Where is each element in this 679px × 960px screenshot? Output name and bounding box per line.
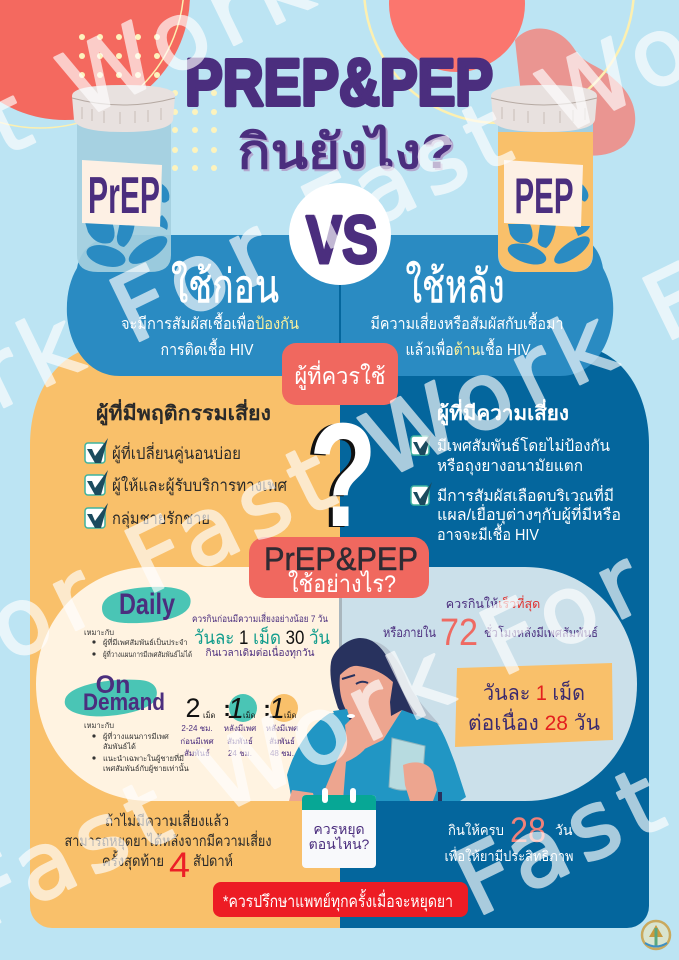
stop guidance: left text: ถ้าไม่มีความเสี่ยงแล้ว: [105, 810, 229, 830]
illustration: woman taking a pill: [287, 638, 466, 801]
left group: risky behaviour: [96, 398, 287, 529]
on demand suitability list: ผู้ที่วางแผนการมีเพศ: [103, 731, 169, 741]
right group: at-risk people: [437, 398, 621, 544]
on demand blob and heading: Demand: [83, 689, 165, 716]
on demand doses: 2: [185, 693, 201, 723]
on demand doses: สัมพันธ์: [184, 748, 210, 758]
on demand suitability list: แนะนำเฉพาะในผู้ชายที่มี: [103, 753, 184, 763]
stop guidance: right text: 28: [510, 811, 546, 850]
daily blob and heading: Daily: [119, 588, 175, 621]
doctor warning bar: *ควรปรึกษาแพทย์ทุกครั้งเมื่อจะหยุดยา: [223, 889, 453, 912]
on demand doses: ก่อนมีเพศ: [180, 737, 214, 746]
on demand doses: เม็ด: [243, 710, 256, 720]
on demand suitability list: [84, 721, 189, 773]
stop guidance: left text: สัปดาห์: [193, 853, 233, 870]
glass of water: [389, 738, 425, 790]
on demand doses: สัมพันธ์: [269, 736, 295, 746]
calendar: when to stop: ควรหยุด: [313, 821, 365, 838]
stop guidance: right text: กินให้ครบ: [448, 822, 504, 838]
calendar: when to stop: ตอนไหน?: [309, 836, 370, 852]
PEP timing text: หรือภายใน: [383, 625, 436, 640]
title: กินยังไง?: [240, 125, 456, 181]
title: PREP&PEP: [185, 45, 493, 119]
background blobs: [0, 0, 635, 171]
shirt: [287, 710, 466, 801]
left group: risky behaviour: กลุ่มชายรักชาย: [112, 510, 210, 529]
right group: at-risk people: แผล/เยื่อบุต่างๆกับผู้ที่มีหรือ: [437, 504, 621, 525]
on demand doses: หลังมีเพศ: [266, 724, 298, 733]
bottle body: dark blue right half: [340, 345, 649, 928]
on demand doses: สัมพันธ์: [227, 736, 253, 746]
before-use text: จะมีการสัมผัสเชื้อเพื่อป้องกัน: [121, 312, 299, 333]
right group: at-risk people: มีเพศสัมพันธ์โดยไม่ป้องกัน: [437, 437, 610, 455]
on demand doses: หลังมีเพศ: [224, 724, 256, 733]
before-use text: [121, 260, 299, 359]
face and chest: [340, 666, 402, 757]
stop guidance: right text: [444, 811, 574, 864]
left group: risky behaviour: ผู้ที่เปลี่ยนคู่นอนบ่อย: [112, 442, 241, 464]
on demand doses: 24 ชม.: [228, 749, 252, 758]
right hand: [403, 762, 437, 801]
title: กินยังไง?: [238, 123, 454, 179]
PEP dosage box: ต่อเนื่อง 28 วัน: [468, 708, 600, 735]
forearm and hand: [320, 726, 371, 801]
usage panel: cream left: [36, 567, 340, 801]
on demand blob and heading: [65, 671, 165, 716]
PEP dosage box: [455, 663, 613, 747]
before-use text: ใช้ก่อน: [171, 260, 279, 312]
daily dosage: ควรกินก่อนมีความเสี่ยงอย่างน้อย 7 วัน: [192, 612, 328, 625]
PEP timing text: 72: [440, 612, 478, 654]
left checkboxes: [85, 438, 108, 528]
stop guidance: left text: [64, 810, 272, 885]
after-use text: มีความเสี่ยงหรือสัมผัสกับเชื้อมา: [370, 312, 564, 333]
logo emblem: [642, 921, 670, 949]
after-use text: ใช้หลัง: [406, 260, 504, 312]
bottle neck: blue band: [67, 235, 613, 376]
on demand suitability list: เพศสัมพันธ์กับผู้ชายเท่านั้น: [103, 763, 189, 773]
doctor warning bar: [213, 882, 468, 917]
on demand doses: เม็ด: [203, 710, 216, 720]
hair: [330, 638, 417, 735]
VS badge: VS: [306, 202, 378, 278]
before-use text: การติดเชื้อ HIV: [160, 338, 254, 359]
bottle body: orange left half: [30, 345, 340, 928]
right group: at-risk people: ผู้ที่มีความเสี่ยง: [437, 398, 569, 427]
right checkboxes: [411, 432, 432, 505]
right group: at-risk people: มีการสัมผัสเลือดบริเวณที่มี: [437, 485, 614, 505]
jar: PrEP: [72, 85, 175, 272]
PEP dosage box: วันละ 1 เม็ด: [483, 679, 585, 705]
calendar: when to stop: [302, 788, 376, 868]
VS badge: [289, 183, 391, 285]
who-should-use button: ผู้ที่ควรใช้: [294, 360, 386, 390]
stop guidance: left text: สามารถหยุดยาได้หลังจากมีความเสี่ยง: [64, 830, 272, 851]
how-to-use button: PrEP&PEP: [264, 541, 418, 577]
after-use text: [370, 260, 564, 359]
how-to-use button: [249, 537, 429, 598]
PEP timing text: [383, 595, 598, 654]
on demand doses: :: [223, 696, 231, 721]
on demand doses: 48 ชม.: [270, 749, 294, 758]
daily dosage: [192, 612, 330, 659]
left group: risky behaviour: ผู้ที่มีพฤติกรรมเสี่ยง: [96, 398, 271, 427]
stop guidance: left text: 4: [169, 846, 190, 885]
who-should-use button: [282, 343, 398, 405]
daily suitability list: ผู้ที่วางแผนการมีเพศสัมพันธ์ไม่ได้: [103, 649, 192, 659]
right group: at-risk people: อาจจะมีเชื้อ HIV: [437, 523, 540, 544]
jar: PEP: [491, 85, 597, 272]
PEP timing text: ชั่วโมงหลังมีเพศสัมพันธ์: [484, 624, 598, 640]
jar: PEP: PEP: [514, 168, 574, 224]
daily suitability list: ผู้ที่มีเพศสัมพันธ์เป็นประจำ: [103, 637, 188, 647]
title: [185, 45, 493, 181]
on demand doses: เม็ด: [284, 710, 297, 720]
stop guidance: left text: ครั้งสุดท้าย: [102, 850, 164, 871]
stop guidance: right text: เพื่อให้ยามีประสิทธิภาพ: [444, 847, 574, 864]
on demand doses: :: [263, 696, 271, 721]
right group: at-risk people: หรือถุงยางอนามัยแตก: [437, 457, 583, 476]
daily dosage: วันละ 1 เม็ด 30 วัน: [194, 625, 330, 649]
on demand doses: 2-24 ชม.: [181, 724, 213, 733]
daily suitability list: [84, 628, 192, 659]
question mark: ?: [305, 394, 373, 559]
after-use text: แล้วเพื่อต้านเชื้อ HIV: [406, 338, 531, 359]
daily suitability list: เหมาะกับ: [84, 628, 114, 637]
on demand doses: 1: [228, 693, 244, 725]
usage panel: light blue right: [340, 567, 637, 801]
jar: PrEP: PrEP: [88, 167, 160, 225]
left group: risky behaviour: ผู้ให้และผู้รับบริการทางเพศ: [112, 476, 287, 496]
how-to-use button: ใช้อย่างไร?: [288, 570, 396, 598]
daily dosage: กินเวลาเดิมต่อเนื่องทุกวัน: [206, 645, 315, 659]
on demand suitability list: เหมาะกับ: [84, 721, 114, 730]
on demand doses: 1: [269, 693, 285, 725]
question mark: ?: [309, 393, 377, 558]
PEP timing text: ควรกินให้เร็วที่สุด: [446, 595, 540, 612]
on demand suitability list: สัมพันธ์ได้: [103, 742, 136, 751]
on demand doses: [180, 693, 298, 758]
hair shadow: [365, 640, 440, 725]
stop guidance: right text: วัน: [555, 822, 573, 838]
on demand blob and heading: On: [96, 671, 130, 699]
